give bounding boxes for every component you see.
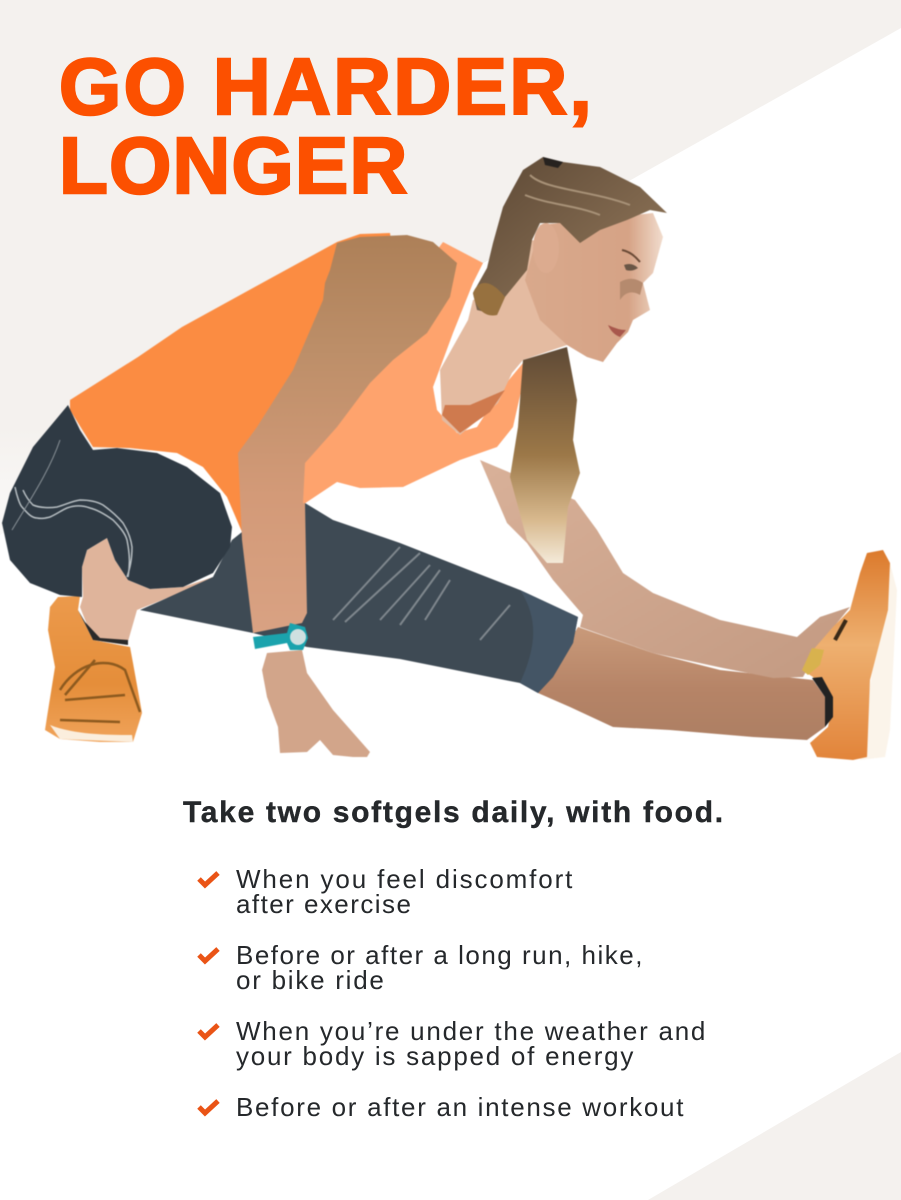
list item 3 (197, 1016, 707, 1071)
title: LONGER (59, 121, 408, 210)
neckline shadow (442, 390, 505, 433)
title: GO HARDER, (59, 42, 594, 131)
face (525, 213, 663, 362)
hand (262, 650, 370, 757)
title (59, 42, 594, 210)
back shoe (45, 596, 142, 742)
list item 1: When you feel discomfort (236, 864, 574, 894)
hair (473, 157, 667, 316)
bent thigh and knee leggings (2, 405, 232, 597)
right thigh leggings (140, 503, 578, 693)
list item 1: after exercise (236, 889, 412, 919)
front shoe (802, 550, 897, 760)
list item 2: Before or after a long run, hike, (236, 940, 644, 970)
front lower leg (538, 627, 825, 740)
ear (533, 223, 559, 273)
list item 1 (197, 864, 574, 919)
skin area behind bent knee (80, 538, 213, 645)
list item 4: Before or after an intense workout (236, 1092, 685, 1122)
watch (253, 623, 308, 650)
subheading: Take two softgels daily, with food. (183, 796, 725, 829)
list item 2: or bike ride (236, 965, 386, 995)
list item 3: When you’re under the weather and (236, 1016, 707, 1046)
far arm (480, 460, 850, 678)
neck and chest (440, 240, 620, 435)
list item 3: your body is sapped of energy (236, 1041, 635, 1071)
list item 2 (197, 940, 644, 995)
ponytail (510, 347, 580, 563)
orange tank top (70, 233, 523, 532)
near arm (238, 235, 457, 633)
